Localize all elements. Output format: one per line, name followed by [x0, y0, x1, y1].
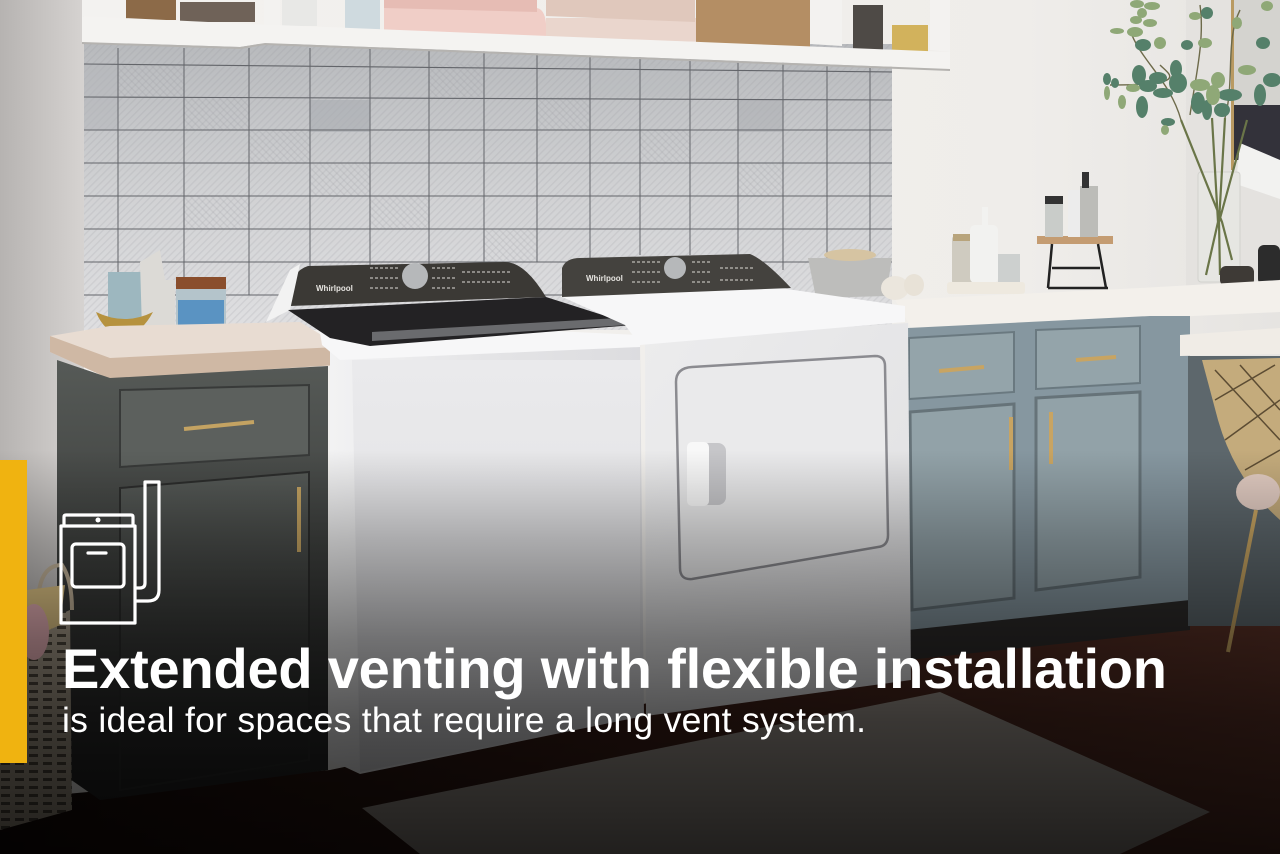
washer glass lid: [288, 297, 634, 346]
open shelf with folded towels and baskets: [82, 0, 950, 71]
plant in vase with wall calendar: [1103, 0, 1280, 282]
washer: [266, 262, 644, 774]
right counter with accessories: [808, 172, 1280, 329]
dryer: [560, 254, 911, 716]
left cabinet: [57, 360, 328, 800]
title: Extended venting with flexible installation: [62, 637, 1167, 700]
left counter with jars: [50, 250, 338, 379]
washer control panel: [266, 262, 546, 322]
rug: [362, 692, 1210, 854]
tile backsplash: [84, 44, 892, 330]
dryer control panel: [562, 254, 791, 297]
washer control panel: Whirlpool: [316, 284, 353, 293]
floor: [0, 602, 1280, 854]
subtitle: is ideal for spaces that require a long vent system.: [62, 700, 866, 740]
laundry basket: [0, 565, 72, 830]
dryer door handle: [687, 442, 726, 506]
icon: vented dryer: [61, 482, 159, 623]
dark bottom gradient: [0, 450, 1280, 854]
yellow accent bar: [0, 460, 27, 763]
chair: [1202, 358, 1280, 652]
dryer door: [676, 356, 888, 579]
dryer control panel: Whirlpool: [586, 274, 623, 283]
right cabinets: [908, 316, 1280, 660]
